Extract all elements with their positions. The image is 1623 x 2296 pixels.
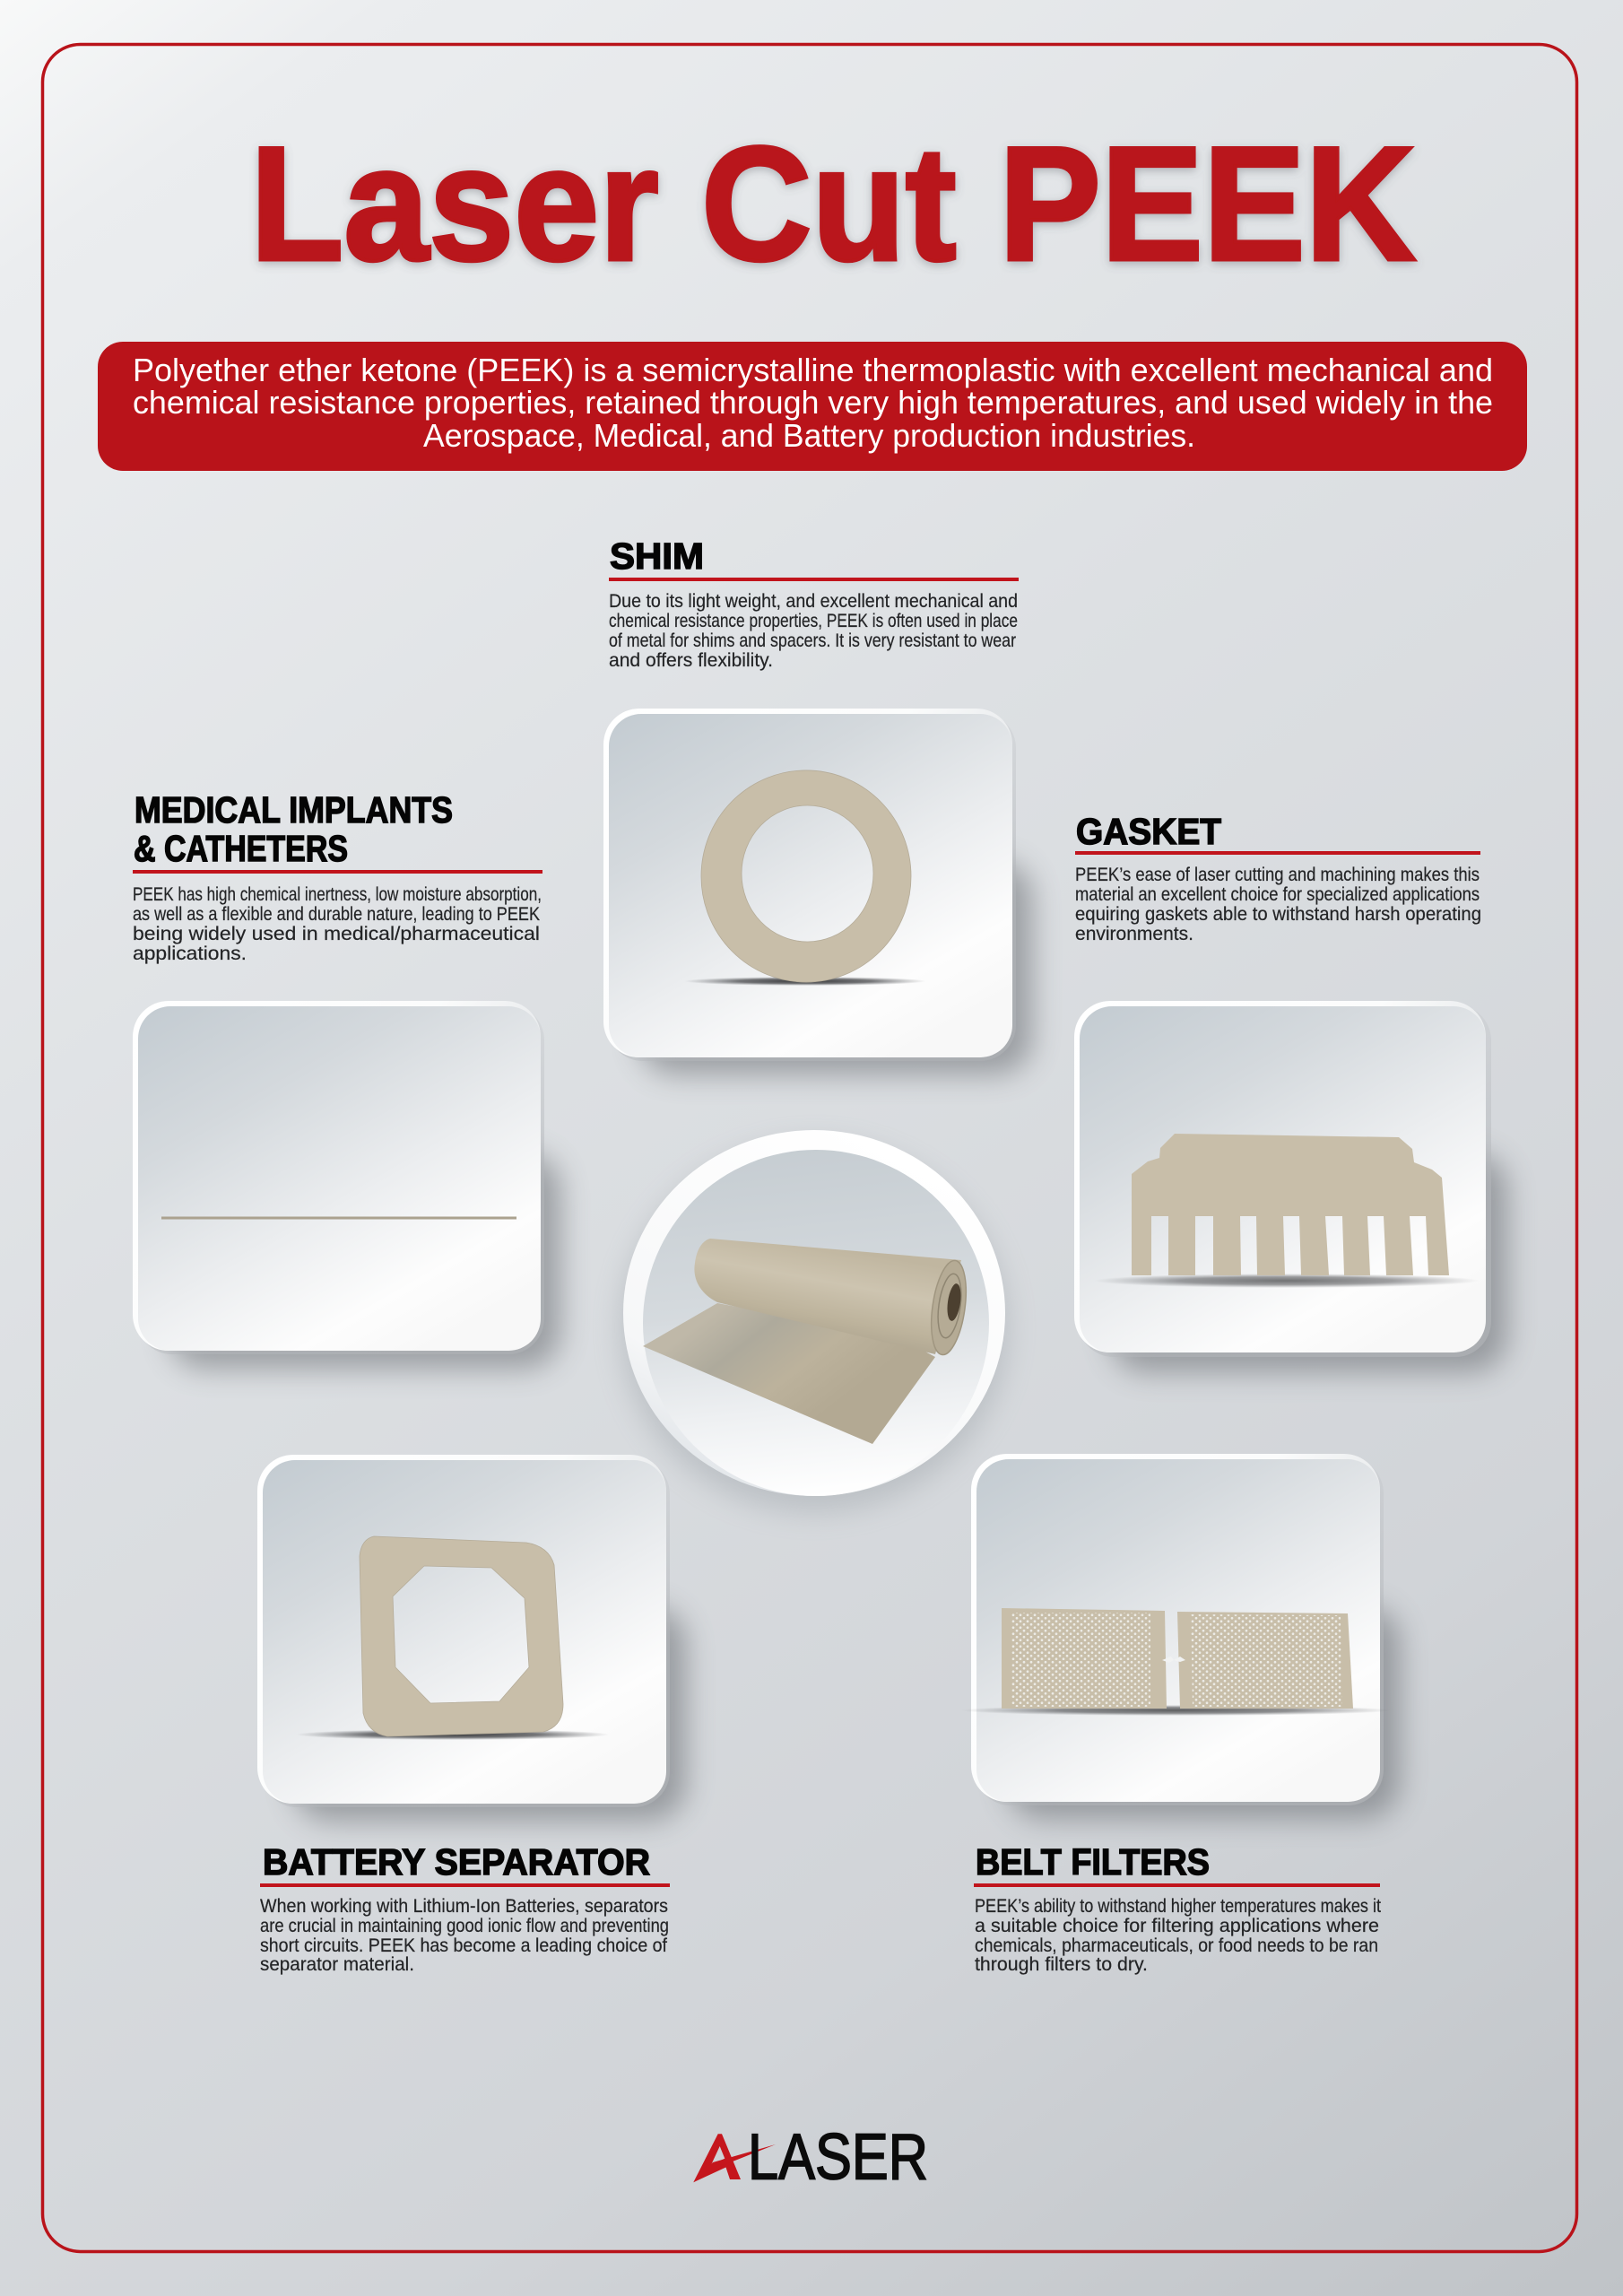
section: gasket [1074, 811, 1507, 1372]
icon: shim ring [701, 770, 911, 982]
medical description: as well as a flexible and durable nature, leading to PEEK [133, 903, 541, 925]
shim heading: SHIM [610, 535, 704, 577]
battery description: separator material. [260, 1953, 414, 1975]
belt filter description: PEEK’s ability to withstand higher temperatures makes it [975, 1895, 1381, 1917]
gasket image card [1074, 1001, 1507, 1372]
icon: battery separator frame [360, 1536, 563, 1736]
shim description: and offers flexibility. [609, 649, 773, 671]
center image: PEEK roll in circle [621, 1130, 1008, 1512]
icon: perforated belt filter [1002, 1608, 1353, 1709]
belt filter description: chemicals, pharmaceuticals, or food needs to be ran [975, 1935, 1378, 1956]
title: Laser Cut PEEK [250, 113, 1416, 294]
shim description: of metal for shims and spacers. It is very resistant to wear [609, 630, 1016, 651]
battery description [260, 1895, 669, 1975]
battery heading: BATTERY SEPARATOR [263, 1841, 650, 1883]
gasket heading: GASKET [1076, 811, 1221, 852]
medical heading [134, 789, 453, 869]
belt filter description: through filters to dry. [975, 1953, 1148, 1975]
shim description: Due to its light weight, and excellent mechanical and [609, 590, 1018, 612]
intro banner: Aerospace, Medical, and Battery production industries. [423, 417, 1195, 454]
belt filter description: a suitable choice for filtering applications where [975, 1915, 1379, 1936]
shim image card [603, 709, 1032, 1074]
icon: catheter tube [161, 1216, 516, 1220]
medical heading: & CATHETERS [134, 828, 348, 869]
icon: rolled sheet [643, 1239, 971, 1444]
medical heading: MEDICAL IMPLANTS [135, 789, 453, 831]
section: belt filters [961, 1454, 1400, 1975]
intro banner: Polyether ether ketone (PEEK) is a semicrystalline thermoplastic with excellent mechanical and [133, 352, 1493, 388]
gasket description: material an excellent choice for specialized applications [1075, 883, 1480, 905]
shim description: chemical resistance properties, PEEK is often used in place [609, 610, 1018, 631]
section: medical implants and catheters [133, 789, 560, 1369]
intro banner: chemical resistance properties, retained through very high temperatures, and used widely in the [133, 384, 1493, 421]
shim description [609, 590, 1018, 671]
section: battery separator [257, 1455, 686, 1975]
battery description: When working with Lithium-Ion Batteries, separators [260, 1895, 668, 1917]
gasket description: PEEK’s ease of laser cutting and machining makes this [1075, 864, 1480, 885]
icon: red A swoosh [693, 2134, 776, 2182]
medical description [133, 883, 542, 964]
gasket description: environments. [1075, 923, 1193, 944]
medical description: being widely used in medical/pharmaceutical [133, 923, 540, 944]
icon: comb gasket [1132, 1134, 1449, 1275]
battery description: are crucial in maintaining good ionic flow and preventing [260, 1915, 669, 1936]
gasket description [1075, 864, 1481, 944]
battery image card [257, 1455, 686, 1821]
medical description: PEEK has high chemical inertness, low moisture absorption, [133, 883, 542, 905]
belt filter image card [961, 1454, 1400, 1819]
section: shim [603, 535, 1032, 1074]
medical image card [133, 1001, 560, 1369]
medical description: applications. [133, 943, 247, 964]
logo: A Laser: LASER [748, 2122, 928, 2194]
belt filter description [975, 1895, 1381, 1975]
intro banner [98, 342, 1527, 471]
logo: A Laser [693, 2122, 928, 2194]
gasket description: equiring gaskets able to withstand harsh operating [1075, 903, 1481, 925]
belt filter heading: BELT FILTERS [976, 1841, 1210, 1883]
battery description: short circuits. PEEK has become a leading choice of [260, 1935, 667, 1956]
